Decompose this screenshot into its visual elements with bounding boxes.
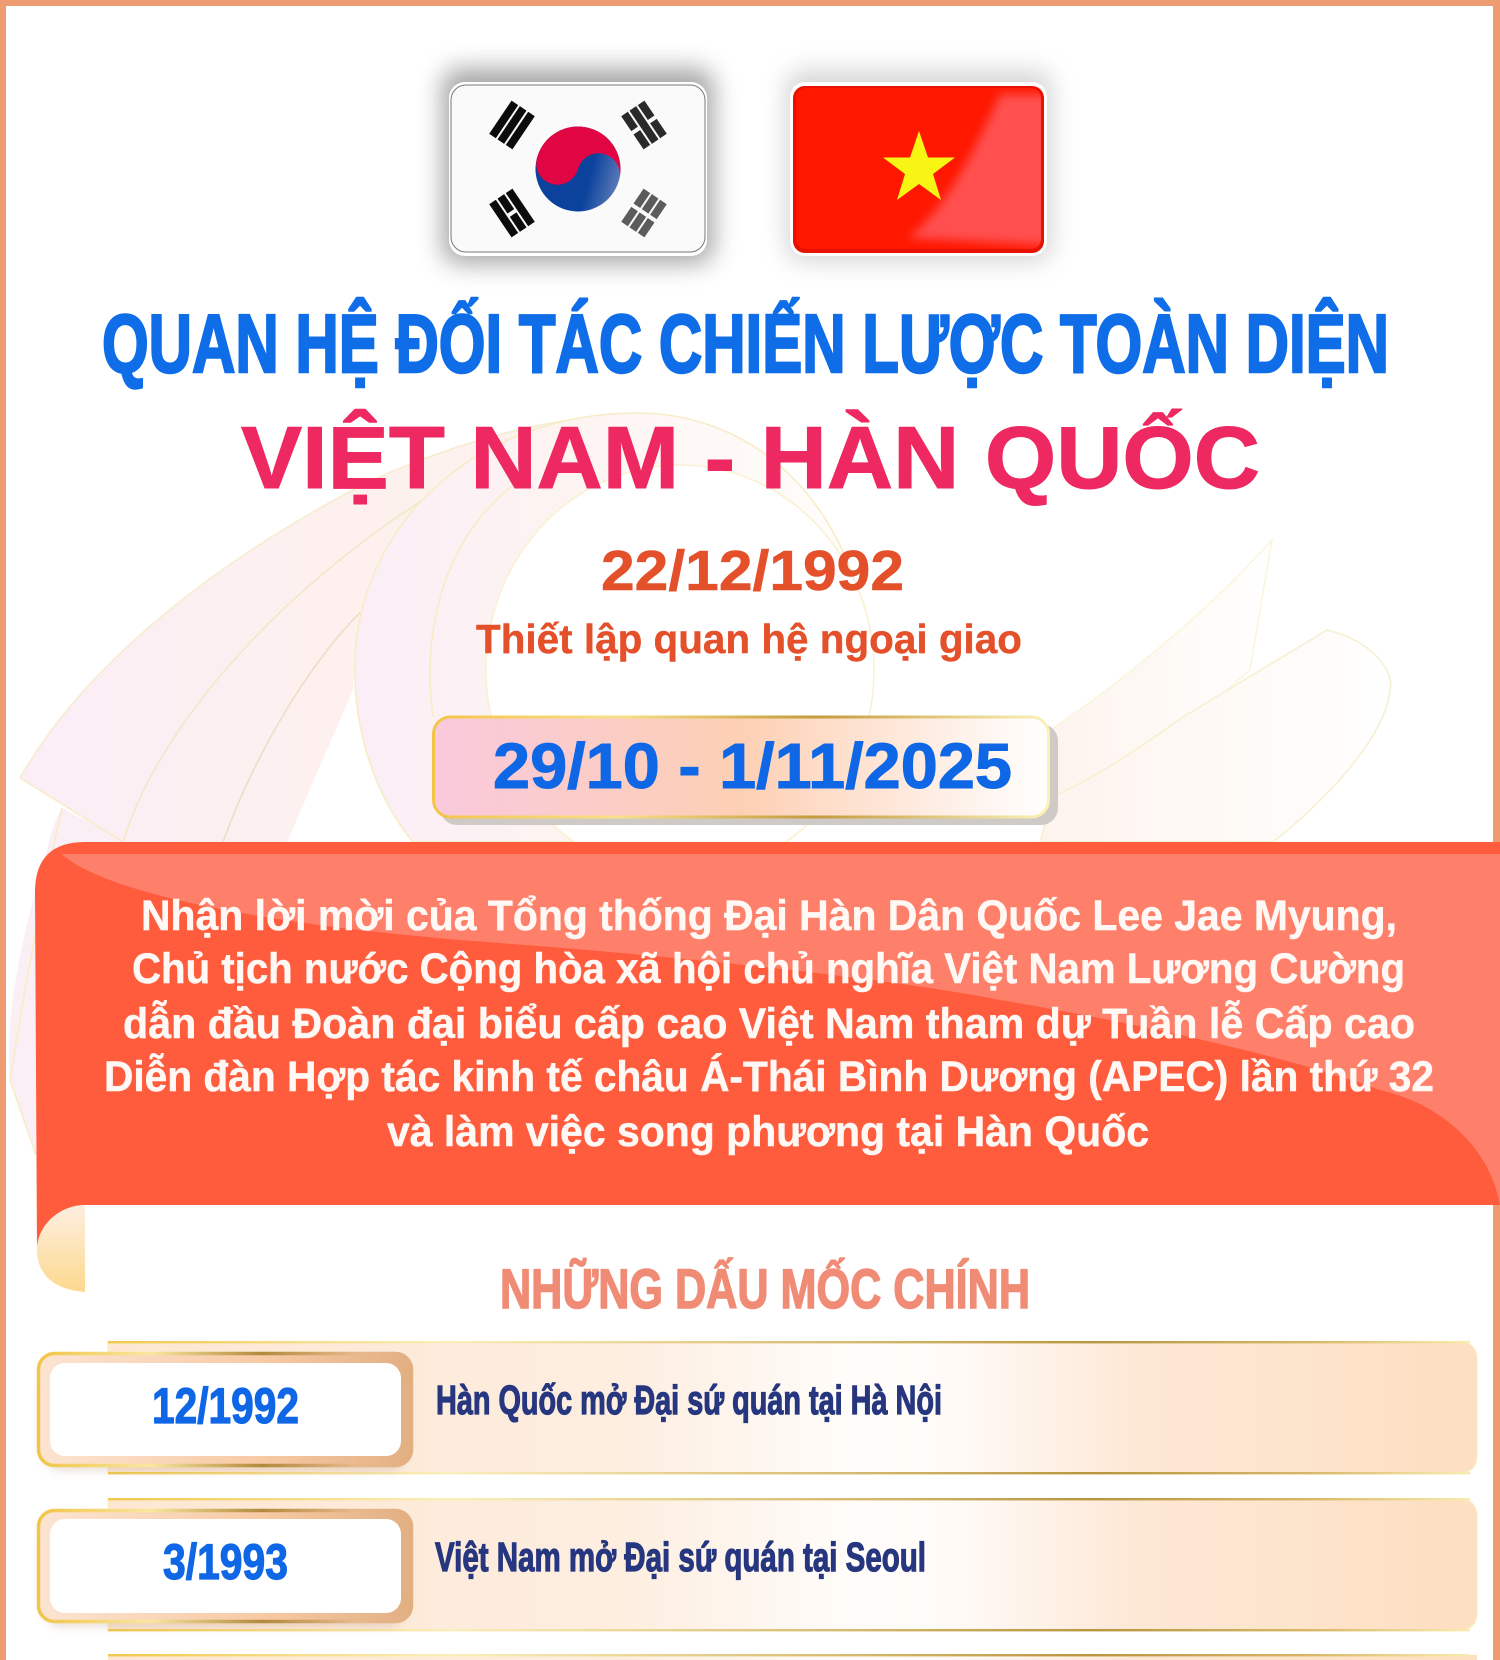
date pill: visit dates: 29/10 - 1/11/2025 (493, 730, 1012, 802)
milestone row: 3/1993: Việt Nam mở Đại sứ quán tại Seoul (435, 1534, 926, 1580)
milestone row: next row top edge (108, 1654, 1477, 1660)
milestone row: 12/1992 (38, 1341, 1477, 1474)
subtitle: Vietnam - Korea: VIỆT NAM - HÀN QUỐC (241, 408, 1260, 507)
banner text (104, 892, 1434, 1156)
decorative ribbon background (9, 413, 1391, 1155)
banner highlight (62, 854, 1500, 1205)
banner text: Diễn đàn Hợp tác kinh tế châu Á-Thái Bình Dương (APEC) lần thứ 32 (104, 1052, 1434, 1101)
banner text: dẫn đầu Đoàn đại biểu cấp cao Việt Nam tham dự Tuần lễ Cấp cao (123, 999, 1415, 1048)
milestone row: 3/1993 (38, 1498, 1477, 1631)
banner text: Chủ tịch nước Cộng hòa xã hội chủ nghĩa Việt Nam Lương Cường (132, 945, 1405, 993)
flag: South Korea (442, 68, 714, 264)
banner body (35, 842, 1500, 1250)
established date: 22/12/1992 (601, 539, 904, 603)
banner text: Nhận lời mời của Tổng thống Đại Hàn Dân Quốc Lee Jae Myung, (141, 892, 1397, 940)
milestone row: 12/1992: 12/1992 (152, 1378, 299, 1434)
panel: red banner (35, 842, 1500, 1292)
milestone row: 3/1993: 3/1993 (163, 1534, 288, 1590)
flag: Vietnam (786, 70, 1060, 262)
milestone row: 12/1992: Hàn Quốc mở Đại sứ quán tại Hà Nội (436, 1377, 942, 1423)
banner curl (37, 1205, 85, 1292)
banner text: và làm việc song phương tại Hàn Quốc (387, 1108, 1149, 1156)
section heading: main milestones: NHỮNG DẤU MỐC CHÍNH (500, 1257, 1030, 1320)
date pill: visit dates (434, 717, 1058, 825)
established caption: Thiết lập quan hệ ngoại giao (476, 616, 1022, 662)
